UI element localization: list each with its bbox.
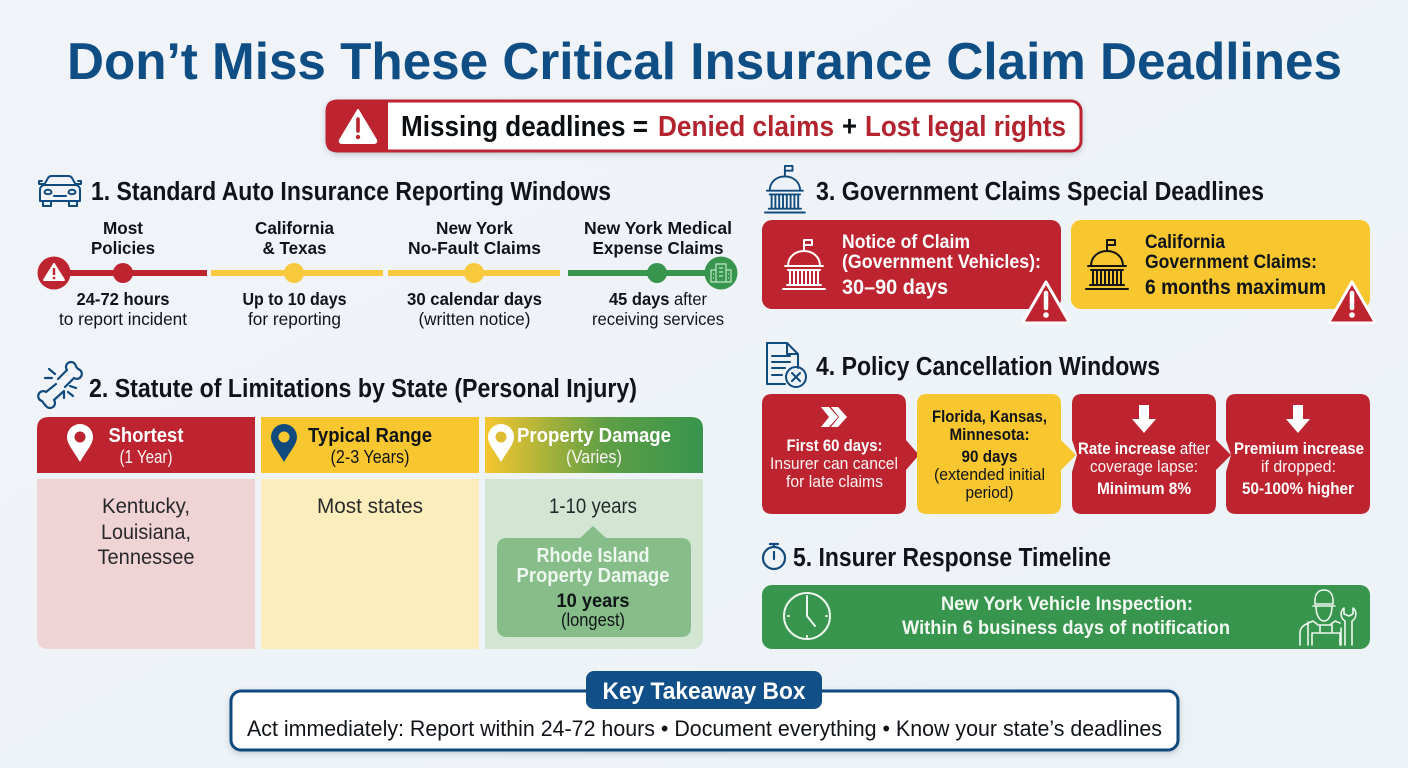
- title: Don’t Miss These Critical Insurance Claim Deadlines: [67, 33, 1342, 91]
- panel: section 2 statute of limitations: [37, 362, 703, 649]
- icon: mechanic with wrench: [1300, 590, 1356, 645]
- column: new york no-fault: New York: [436, 218, 513, 238]
- column: shortest: Shortest: [108, 425, 184, 447]
- warning banner: [326, 100, 1081, 152]
- column: california and texas: & Texas: [262, 238, 327, 258]
- card: california government claims: 6 months maximum: [1145, 276, 1326, 299]
- icon: double chevron: [821, 407, 847, 427]
- key takeaway heading pill: [586, 671, 822, 709]
- column: new york medical: receiving services: [592, 309, 724, 329]
- card: florida kansas minnesota: period): [966, 483, 1014, 502]
- card: rate increase: Minimum 8%: [1097, 479, 1191, 498]
- banner text: [401, 111, 1066, 143]
- column: new york no-fault: 30 calendar days: [407, 289, 542, 309]
- card: notice of claim: (Government Vehicles):: [842, 252, 1041, 273]
- column: shortest: (1 Year): [120, 447, 172, 467]
- column: shortest: Tennessee: [98, 546, 194, 569]
- column: california and texas: [242, 218, 347, 329]
- banner text: Lost legal rights: [865, 111, 1066, 143]
- column: new york medical: 45 days after: [609, 289, 707, 309]
- callout: rhode island: Rhode Island: [536, 545, 650, 567]
- card: vehicle inspection: Within 6 business days of notification: [902, 617, 1230, 639]
- icon: capitol building: [765, 166, 805, 212]
- callout: rhode island: Property Damage: [516, 565, 670, 587]
- column: new york medical: Expense Claims: [592, 238, 724, 258]
- column: california and texas: for reporting: [248, 309, 341, 329]
- column: property damage: (Varies): [566, 447, 622, 467]
- icon: car: [39, 176, 81, 206]
- section 1 heading: 1. Standard Auto Insurance Reporting Windows: [91, 178, 611, 206]
- icon: down arrow: [1286, 405, 1310, 433]
- column: shortest: Louisiana,: [101, 521, 191, 544]
- card: first 60 days: [762, 394, 919, 514]
- column: property damage: [485, 417, 703, 649]
- card: florida kansas minnesota: (extended initial: [934, 465, 1045, 484]
- takeaway text: Act immediately: Report within 24-72 hours • Document everything • Know your state’s deadlines: [247, 716, 1162, 741]
- card: premium increase: if dropped:: [1261, 457, 1336, 476]
- card: rate increase: coverage lapse:: [1090, 457, 1198, 476]
- icon: stopwatch: [763, 544, 785, 569]
- card: premium increase: 50-100% higher: [1242, 479, 1354, 498]
- card: florida kansas minnesota: Florida, Kansas,: [932, 407, 1047, 426]
- section 2 heading: 2. Statute of Limitations by State (Personal Injury): [89, 375, 637, 403]
- card: notice of claim: Notice of Claim: [842, 232, 970, 253]
- banner text: Denied claims: [658, 111, 834, 143]
- column: property damage: 1-10 years: [549, 495, 637, 518]
- column: most policies: to report incident: [59, 309, 187, 329]
- card: premium increase: [1226, 394, 1370, 514]
- timeline bar: [56, 263, 713, 283]
- card: florida kansas minnesota: 90 days: [962, 447, 1018, 466]
- card: vehicle inspection: New York Vehicle Inspection:: [941, 593, 1193, 615]
- callout: rhode island: [497, 526, 691, 637]
- panel: section 5 insurer response: [762, 544, 1370, 649]
- card: california government claims: [1071, 220, 1370, 309]
- column: typical range: (2-3 Years): [330, 447, 410, 467]
- column: most policies: Policies: [91, 238, 155, 258]
- column: new york no-fault: No-Fault Claims: [408, 238, 541, 258]
- column: most policies: [59, 218, 187, 329]
- column: shortest: Kentucky,: [102, 495, 190, 518]
- column: most policies: Most: [103, 218, 143, 238]
- card: notice of claim: 30–90 days: [842, 276, 948, 299]
- column: typical range: Typical Range: [308, 425, 432, 447]
- callout: rhode island: 10 years: [556, 591, 630, 612]
- panel: section 1 reporting windows: [38, 176, 738, 329]
- card: first 60 days: First 60 days:: [786, 436, 882, 455]
- column: california and texas: Up to 10 days: [242, 289, 347, 309]
- panel: key takeaway box: [231, 671, 1178, 750]
- column: shortest: [37, 417, 255, 649]
- icon: document with x: [767, 343, 806, 387]
- column: most policies: 24-72 hours: [76, 289, 170, 309]
- icon: warning circle: [38, 256, 70, 290]
- icon: down arrow: [1132, 405, 1156, 433]
- card: vehicle inspection: [762, 585, 1370, 649]
- icon: clock: [784, 593, 830, 639]
- section 4 heading: 4. Policy Cancellation Windows: [816, 353, 1160, 381]
- column: new york no-fault: [407, 218, 542, 329]
- card: california government claims: California: [1145, 232, 1225, 253]
- icon: red warning triangle: [1024, 282, 1068, 323]
- icon: warning triangle: [340, 110, 376, 143]
- column: california and texas: California: [255, 218, 334, 238]
- panel: section 3 government claims: [762, 166, 1374, 323]
- column: typical range: Most states: [317, 495, 423, 518]
- card: florida kansas minnesota: Minnesota:: [950, 425, 1030, 444]
- section 5 heading: 5. Insurer Response Timeline: [793, 544, 1111, 572]
- card: rate increase: [1072, 394, 1231, 514]
- panel: section 4 policy cancellation: [762, 343, 1370, 514]
- column: property damage: Property Damage: [517, 425, 671, 447]
- column: typical range: [261, 417, 479, 649]
- banner text: +: [842, 111, 857, 143]
- card: first 60 days: Insurer can cancel: [770, 454, 898, 473]
- column: new york medical: [584, 218, 732, 329]
- icon: broken bone: [38, 362, 82, 408]
- card: california government claims: Government Claims:: [1145, 252, 1317, 273]
- column: new york medical: New York Medical: [584, 218, 732, 238]
- card: first 60 days: for late claims: [786, 472, 883, 491]
- card: premium increase: Premium increase: [1234, 439, 1364, 458]
- icon: red warning triangle: [1330, 282, 1374, 323]
- callout: rhode island: (longest): [561, 610, 625, 630]
- card: notice of claim: [762, 220, 1061, 309]
- icon: hospital circle: [704, 256, 738, 290]
- column: new york no-fault: (written notice): [418, 309, 530, 329]
- card: florida kansas minnesota: [917, 394, 1076, 514]
- section 3 heading: 3. Government Claims Special Deadlines: [816, 178, 1264, 206]
- banner text: Missing deadlines =: [401, 111, 648, 143]
- key takeaway heading pill: Key Takeaway Box: [602, 678, 806, 705]
- card: rate increase: Rate increase after: [1078, 439, 1210, 458]
